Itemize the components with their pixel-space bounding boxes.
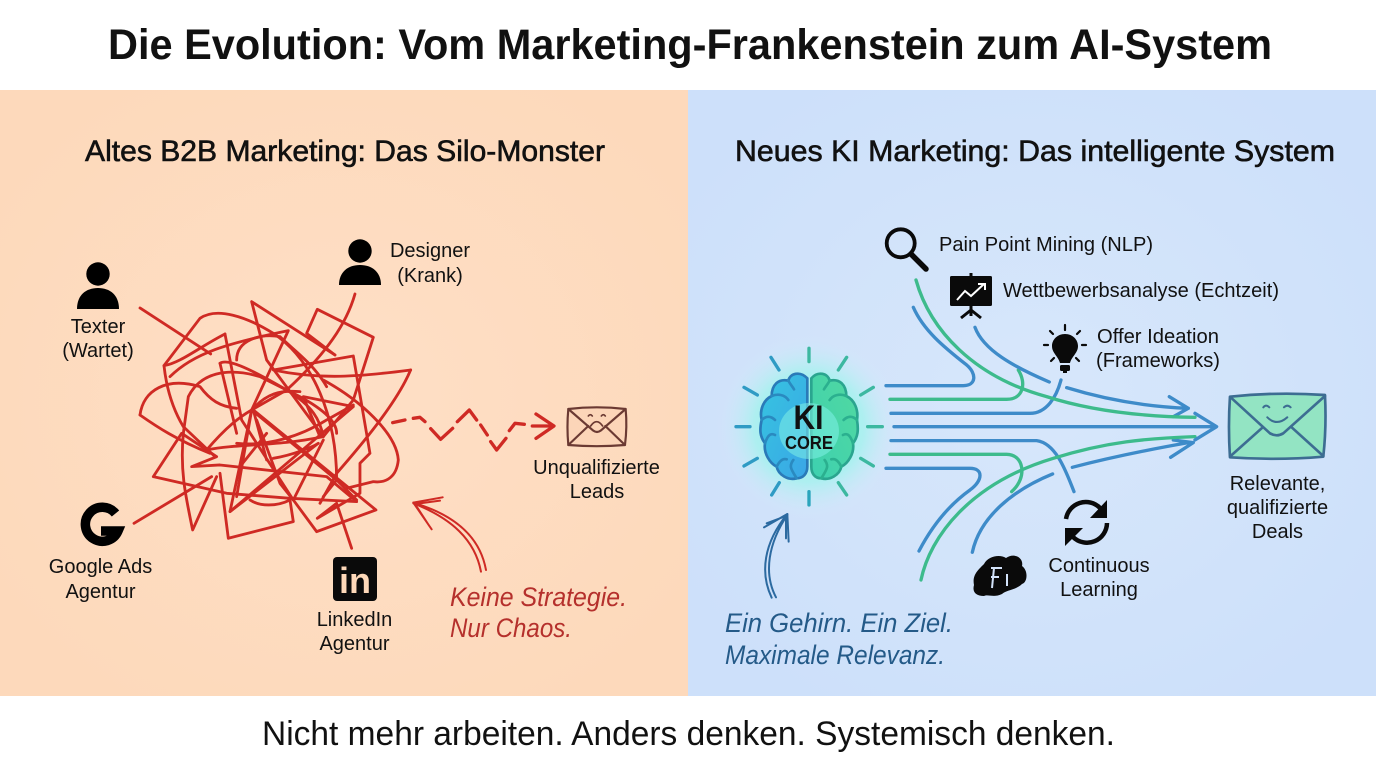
heading: old marketing: Altes B2B Marketing: Das Silo-Monster (85, 135, 605, 168)
icon: presentation chart (950, 273, 992, 318)
label: KI CORE: KI (794, 399, 824, 437)
chaos scribble (134, 294, 411, 548)
label: unqualified leads: Unqualifizierte (533, 457, 660, 479)
label: Designer (390, 240, 470, 287)
dashed arrow to leads (393, 410, 554, 450)
label: continuous learning: Continuous (1048, 555, 1150, 577)
icon: magnifier (887, 229, 926, 269)
callout: chaos note (450, 582, 627, 643)
callout: brain note (725, 608, 953, 670)
icon: black blob (973, 556, 1026, 596)
label: KI CORE (785, 399, 833, 453)
callout: chaos note: Nur Chaos. (450, 613, 572, 643)
label: KI CORE: CORE (785, 432, 833, 453)
callout: brain note: Ein Gehirn. Ein Ziel. (725, 608, 953, 638)
label: LinkedIn (317, 609, 392, 655)
title: Die Evolution: Vom Marketing-Frankenstein zum AI-System (108, 21, 1272, 69)
label: offer ideation: Offer Ideation (1097, 326, 1219, 348)
label: Google Ads: Agentur (65, 581, 136, 603)
panel: new AI marketing (688, 90, 1376, 696)
icon: sad envelope (567, 407, 626, 446)
label: offer ideation: (Frameworks) (1096, 350, 1220, 372)
label: qualified deals: Relevante, (1230, 473, 1325, 495)
label: competitive analysis: Wettbewerbsanalyse (Echtzeit) (1003, 280, 1279, 302)
icon: Texter person (77, 262, 119, 309)
label: unqualified leads (533, 457, 660, 503)
label: qualified deals: qualifizierte (1227, 497, 1328, 519)
label: LinkedIn: LinkedIn (317, 609, 392, 631)
label: Google Ads: Google Ads (49, 556, 152, 578)
icon: Google G (85, 507, 118, 541)
label: LinkedIn: Agentur (319, 633, 390, 655)
KI core brain (717, 335, 901, 519)
label: Designer: Designer (390, 240, 470, 262)
callout: brain note: Maximale Relevanz. (725, 640, 945, 670)
panel: old B2B marketing (0, 90, 688, 696)
red hand-drawn arrow (413, 497, 486, 572)
glow behind KI text (779, 403, 839, 459)
icon: happy envelope (1229, 394, 1326, 459)
label: qualified deals: Deals (1252, 521, 1303, 543)
label: Google Ads (49, 556, 152, 603)
heading: new marketing: Neues KI Marketing: Das intelligente System (735, 135, 1335, 168)
footer tagline: Nicht mehr arbeiten. Anders denken. Systemisch denken. (262, 715, 1115, 753)
rays (736, 348, 882, 505)
icon: LinkedIn (333, 557, 377, 601)
label: pain point mining: Pain Point Mining (NLP) (939, 234, 1153, 256)
label: continuous learning: Learning (1060, 579, 1138, 601)
label: Texter (62, 316, 134, 362)
brain halves (760, 374, 858, 479)
flow lines to deals (886, 280, 1217, 580)
icon: Designer person (339, 239, 381, 285)
icon: LinkedIn: in (339, 560, 371, 601)
label: Designer: (Krank) (397, 265, 463, 287)
label: unqualified leads: Leads (570, 481, 624, 503)
icon: light bulb (1044, 325, 1086, 372)
label: Texter: (Wartet) (62, 340, 134, 362)
icon: refresh arrows (1065, 500, 1107, 546)
label: continuous learning (1048, 555, 1150, 601)
blue hand-drawn arrow (764, 514, 789, 598)
label: offer ideation (1096, 326, 1220, 372)
label: qualified deals (1227, 473, 1328, 543)
label: Texter: Texter (71, 316, 126, 338)
callout: chaos note: Keine Strategie. (450, 582, 627, 612)
